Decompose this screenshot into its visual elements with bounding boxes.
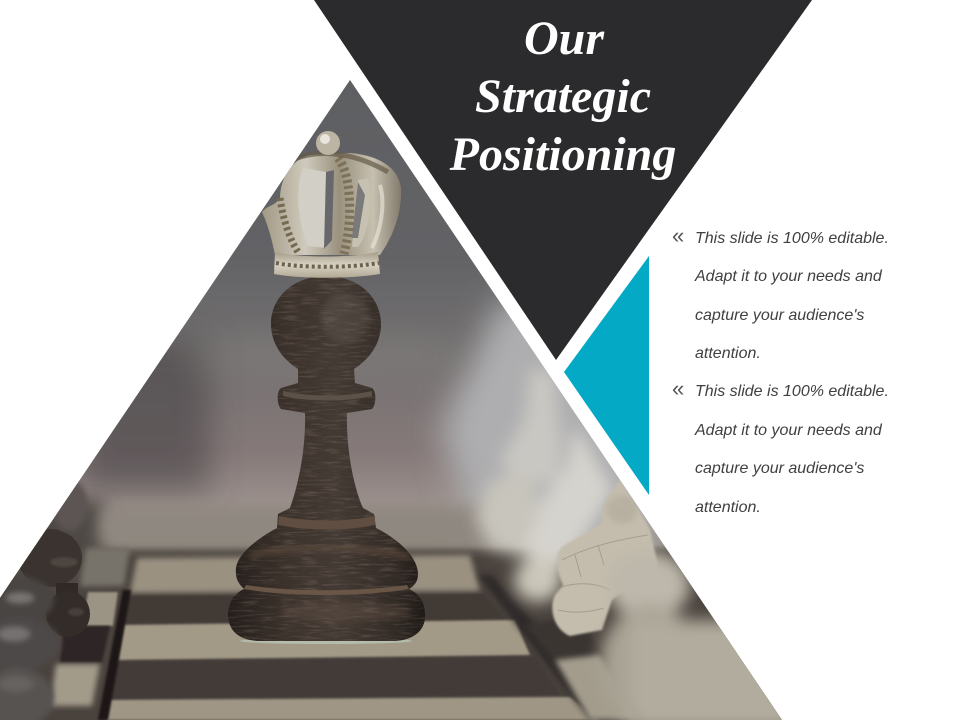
- text block 2: Adapt it to your needs and: [694, 422, 883, 439]
- board groove: [98, 590, 131, 720]
- photo triangle: chess pawn with crown: [0, 80, 820, 720]
- text block 2: [672, 376, 889, 516]
- left dark pawn: [18, 529, 90, 637]
- crown: [262, 131, 401, 278]
- text block 2: capture your audience's: [695, 460, 864, 477]
- text block 1: attention.: [695, 345, 761, 362]
- bullet icon 1: «: [672, 223, 684, 248]
- text block 2: This slide is 100% editable.: [695, 383, 889, 400]
- pawn details: [244, 585, 409, 595]
- blurred white pawns: [475, 370, 613, 602]
- crown finial: [316, 131, 340, 155]
- sharp white pawn: [552, 480, 658, 636]
- dark title triangle: [314, 0, 812, 360]
- bullet icon 2: «: [672, 376, 684, 401]
- text block 1: [672, 223, 889, 362]
- title: Our: [524, 12, 605, 65]
- title: Strategic: [475, 70, 651, 123]
- blurred left pawns: [0, 479, 88, 720]
- title: Positioning: [449, 128, 676, 181]
- crown band: [274, 252, 380, 278]
- teal triangle: [564, 256, 649, 495]
- photo background: [0, 80, 800, 720]
- text block 1: capture your audience's: [695, 307, 864, 324]
- chess board: [0, 500, 820, 720]
- text block 2: attention.: [695, 499, 761, 516]
- text block 1: Adapt it to your needs and: [694, 268, 883, 285]
- text block 1: This slide is 100% editable.: [695, 230, 889, 247]
- center pawn: [228, 276, 425, 644]
- crown arches: [262, 153, 401, 255]
- blurred front white pawns: [600, 551, 800, 720]
